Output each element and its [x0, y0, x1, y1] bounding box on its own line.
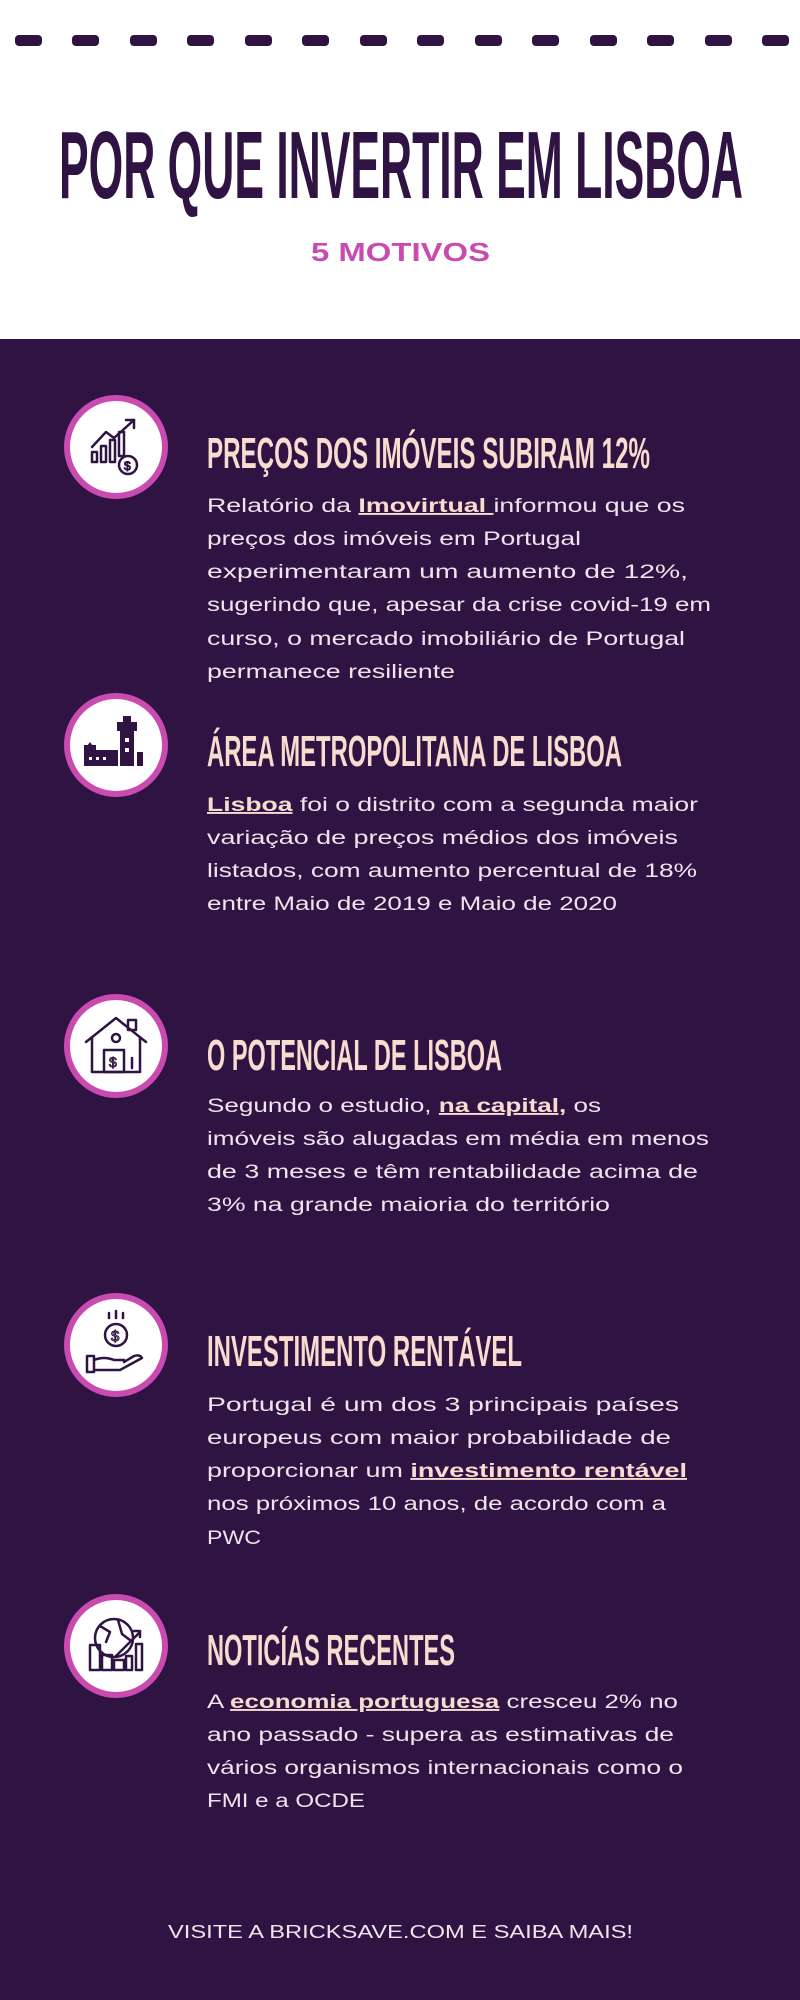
icon: house with dollar	[67, 997, 165, 1095]
subtitle: 5 MOTIVOS	[311, 237, 490, 267]
icon: hand with coin	[67, 1296, 165, 1394]
icon: hand with coin: $	[111, 1328, 120, 1345]
footer call to action: VISITE A BRICKSAVE.COM E SAIBA MAIS!	[168, 1922, 633, 1942]
text 5: ano passado - supera as estimativas de	[207, 1725, 674, 1746]
icon: house with dollar: $	[109, 1054, 117, 1070]
text 1: Relatório da Imovirtual informou que os	[207, 496, 685, 517]
text 4: PWC	[207, 1528, 261, 1549]
text 3: imóveis são alugadas em média em menos	[207, 1129, 709, 1150]
text 1	[207, 496, 711, 683]
icon: rising chart with coin	[67, 398, 165, 496]
text 1: permanece resiliente	[207, 662, 455, 683]
text 1: curso, o mercado imobiliário de Portugal	[207, 629, 685, 650]
text 2: entre Maio de 2019 e Maio de 2020	[207, 894, 617, 915]
text 2: listados, com aumento percentual de 18%	[207, 861, 697, 882]
text 5: A economia portuguesa cresceu 2% no	[207, 1692, 678, 1713]
icon: rising chart with coin: $	[124, 459, 131, 473]
text 1: preços dos imóveis em Portugal	[207, 529, 581, 550]
heading 3: O POTENCIAL DE LISBOA	[207, 1031, 502, 1080]
text 3: Segundo o estudio, na capital, os	[207, 1096, 601, 1117]
icon: castle tower	[67, 696, 165, 794]
text 1: sugerindo que, apesar da crise covid-19 em	[207, 595, 711, 616]
dashed top border	[15, 35, 789, 46]
text 3: de 3 meses e têm rentabilidade acima de	[207, 1162, 698, 1183]
text 4: proporcionar um investimento rentável	[207, 1461, 687, 1482]
heading 5: NOTICÍAS RECENTES	[207, 1625, 455, 1675]
text 2: Lisboa foi o distrito com a segunda maior	[207, 795, 699, 816]
text 2	[207, 795, 699, 915]
text 4: europeus com maior probabilidade de	[207, 1428, 671, 1449]
text 2: variação de preços médios dos imóveis	[207, 828, 678, 849]
text 5: FMI e a OCDE	[207, 1791, 365, 1812]
text 5	[207, 1692, 683, 1812]
text 4: nos próximos 10 anos, de acordo com a	[207, 1494, 667, 1515]
text 4	[207, 1395, 687, 1549]
text 4: Portugal é um dos 3 principais países	[207, 1395, 679, 1416]
icon: globe with coins and chart	[67, 1597, 165, 1695]
text 1: experimentaram um aumento de 12%,	[207, 562, 688, 583]
text 3	[207, 1096, 709, 1216]
text 3: 3% na grande maioria do território	[207, 1195, 610, 1216]
heading 4: INVESTIMENTO RENTÁVEL	[207, 1326, 522, 1376]
text 5: vários organismos internacionais como o	[207, 1758, 683, 1779]
